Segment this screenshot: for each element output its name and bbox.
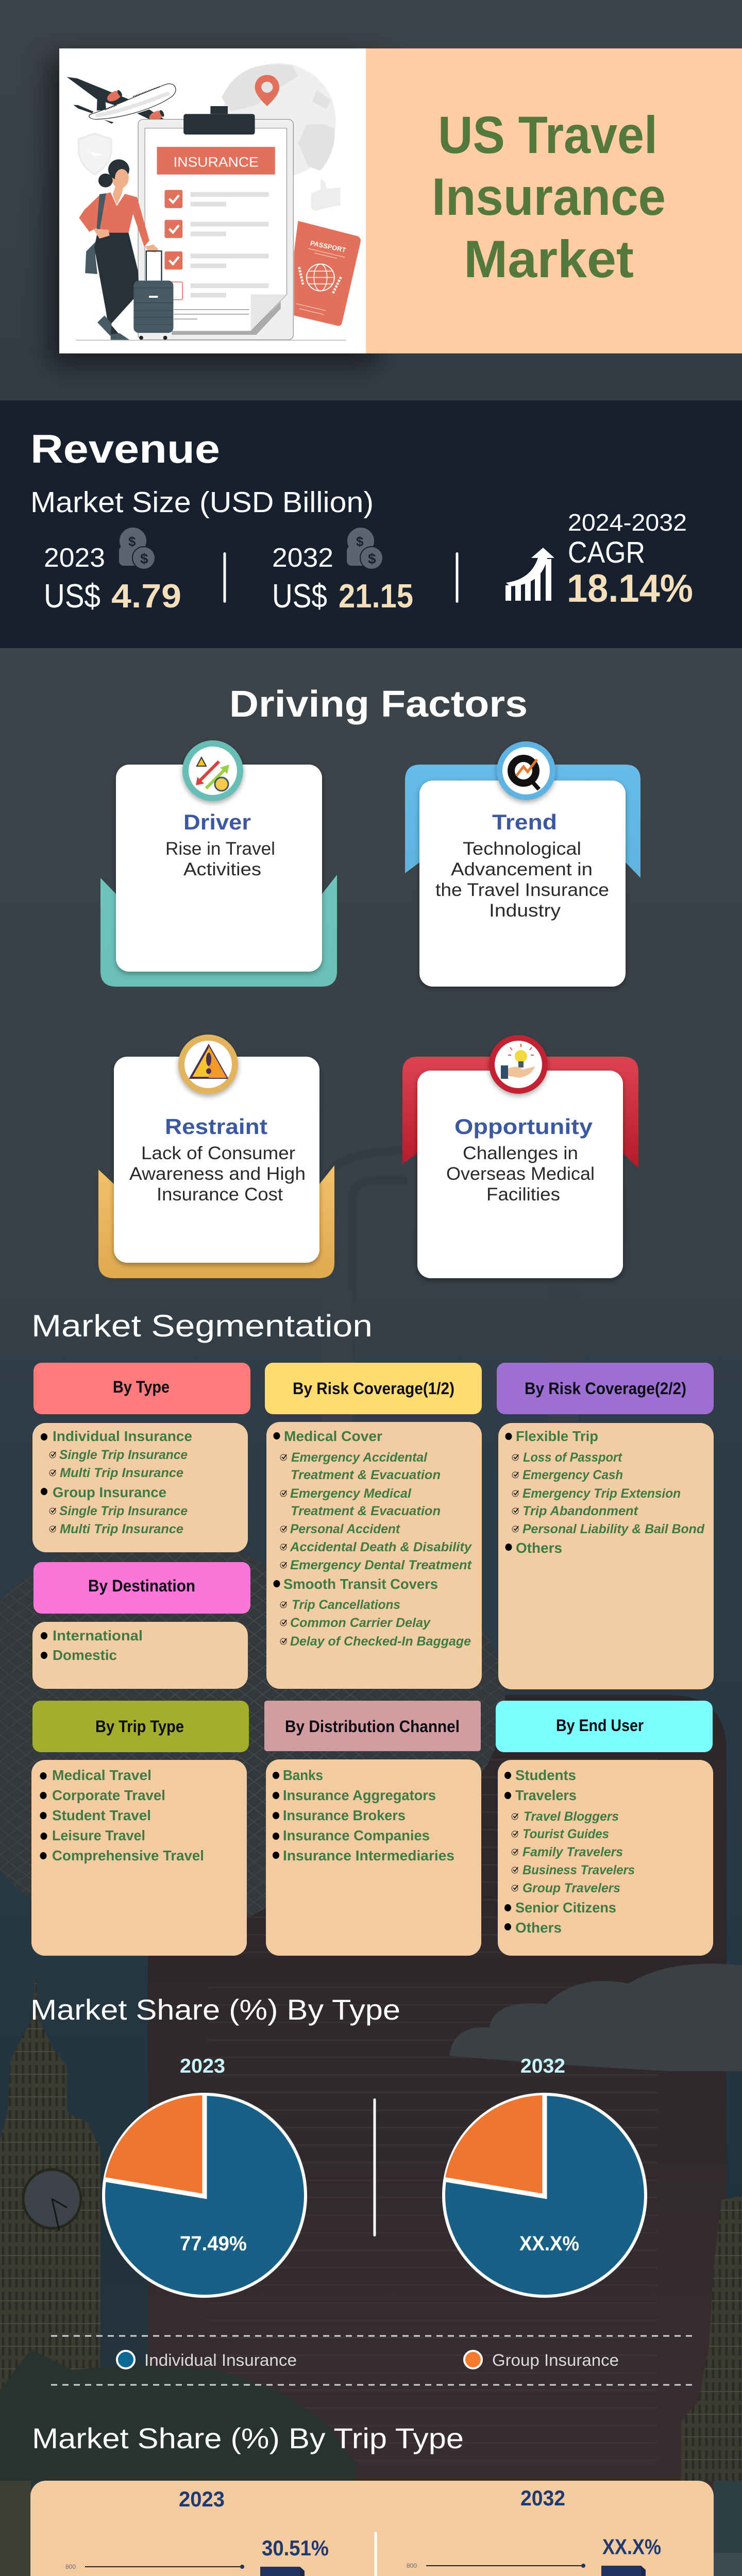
list: by end user items: Tourist Guides <box>522 1827 609 1841</box>
chart: 2023 bars: 2023 <box>179 2487 225 2511</box>
panel: by destination <box>32 1562 250 1689</box>
chart: 2032 bars <box>407 2486 661 2576</box>
stat: CAGR <box>567 509 693 611</box>
list: risk coverage 2 items <box>498 1423 714 1689</box>
year label 2032: 2032 <box>520 2055 565 2077</box>
text: restraint description <box>129 1143 306 1205</box>
text: restraint description: Awareness and High <box>129 1164 306 1184</box>
list: by end user items: Travel Bloggers <box>524 1809 619 1824</box>
icon: coins 2032: $ <box>368 551 376 567</box>
list: risk coverage 1 items: Delay of Checked-In Baggage <box>290 1634 471 1649</box>
list: by destination items: International <box>53 1628 143 1643</box>
heading: trend: Trend <box>492 810 557 834</box>
panel: by end user <box>496 1701 713 1956</box>
list: by distribution channel items: Insurance Brokers <box>283 1807 406 1823</box>
heading: restraint: Restraint <box>165 1114 267 1139</box>
icon: passport: PASSPORT <box>310 239 347 254</box>
divider <box>373 2098 376 2236</box>
list: risk coverage 1 items: Medical Cover <box>284 1428 382 1444</box>
chart: 2023 bars: 800 <box>65 2563 76 2570</box>
list: by type items: Group Insurance <box>53 1484 166 1500</box>
chart: 2032 bars: 2032 <box>520 2486 565 2510</box>
list: by distribution channel items <box>266 1759 481 1956</box>
stat: 2032 market size: US$ <box>272 577 327 615</box>
divider <box>456 552 459 603</box>
pie chart 2023 <box>104 2094 306 2296</box>
list: by type items: Multi Trip Insurance <box>60 1466 183 1480</box>
list: risk coverage 1 items: Emergency Dental Treatment <box>290 1558 473 1572</box>
list: risk coverage 1 items: Treatment & Evacuation <box>291 1504 441 1518</box>
year label 2023: 2023 <box>180 2055 225 2077</box>
title: Market <box>464 230 634 289</box>
header: by type <box>33 1363 250 1414</box>
list: by trip type items: Medical Travel <box>52 1767 151 1783</box>
stat: 2023 market size: 4.79 <box>111 577 181 615</box>
icon: shield <box>79 133 111 175</box>
list: risk coverage 1 items: Accidental Death & Disability <box>290 1540 472 1554</box>
text: restraint description: Lack of Consumer <box>141 1143 295 1163</box>
header: by destination <box>33 1562 250 1614</box>
heading: market share by type: Market Share (%) By Type <box>30 1993 400 2026</box>
list: risk coverage 1 items: Emergency Accidental <box>291 1450 428 1465</box>
icon: passport <box>294 221 361 326</box>
icon: location pin <box>255 75 279 106</box>
text: driver description: Activities <box>183 859 261 879</box>
heading: opportunity: Opportunity <box>454 1114 593 1139</box>
icon: coins 2023 <box>119 528 155 569</box>
list: by type items: Individual Insurance <box>53 1428 192 1444</box>
panel: revenue band <box>0 400 742 648</box>
icon: trend magnifier <box>497 741 555 800</box>
list: risk coverage 2 items: Personal Liability & Bail Bond <box>522 1522 705 1536</box>
list: risk coverage 1 items <box>266 1422 482 1689</box>
panel: trend card <box>405 741 640 987</box>
list: by end user items: Business Travelers <box>522 1863 635 1877</box>
list: by distribution channel items: Insurance Intermediaries <box>283 1848 454 1863</box>
title <box>432 106 666 289</box>
list: by end user items: Others <box>515 1920 562 1936</box>
list: by end user items: Students <box>515 1767 576 1783</box>
panel: share by trip type <box>30 2481 714 2576</box>
heading: market share by trip type: Market Share (%) By Trip Type <box>32 2422 464 2454</box>
text: trend description: Technological <box>463 839 581 859</box>
panel: by risk coverage 2 of 2 <box>497 1363 714 1689</box>
list: by trip type items: Student Travel <box>52 1807 151 1823</box>
list: by type items <box>32 1423 248 1552</box>
text: trend description: the Travel Insurance <box>435 880 609 900</box>
list: by end user items: Family Travelers <box>522 1845 623 1859</box>
text: opportunity description: Facilities <box>486 1184 560 1205</box>
list: by trip type items: Corporate Travel <box>52 1787 165 1803</box>
pie chart 2032: XX.X% <box>519 2232 579 2255</box>
chart: 2023 bars <box>65 2487 329 2576</box>
list: by end user items <box>498 1760 713 1956</box>
header: by destination: By Destination <box>88 1577 195 1595</box>
stat: 2023 market size <box>44 543 181 615</box>
panel: by trip type <box>31 1701 249 1956</box>
legend: share by type: Individual Insurance <box>144 2351 297 2369</box>
list: risk coverage 1 items: Treatment & Evacuation <box>291 1468 441 1482</box>
stat: CAGR: CAGR <box>568 536 645 569</box>
illustration: traveller with suitcase <box>79 159 173 340</box>
icon: thumbs up <box>311 178 341 211</box>
panel: opportunity card <box>402 1035 638 1278</box>
clipboard <box>138 106 293 340</box>
header: by distribution channel: By Distribution Channel <box>285 1717 460 1736</box>
panel: by risk coverage 1 of 2 <box>265 1363 482 1689</box>
text: trend description <box>435 839 609 921</box>
text: driver description <box>165 839 275 879</box>
list: risk coverage 1 items: Personal Accident <box>290 1522 401 1536</box>
chart: 2023 bars: 30.51% <box>262 2536 329 2560</box>
heading: driver: Driver <box>183 810 251 834</box>
chart: 2032 bars: 800 <box>407 2562 417 2569</box>
header: by risk coverage 1: By Risk Coverage(1/2) <box>293 1379 454 1398</box>
list: by type items: Single Trip Insurance <box>59 1448 188 1462</box>
icon: coins 2023: $ <box>128 534 136 549</box>
checklist <box>164 190 268 319</box>
panel: by distribution channel <box>264 1701 481 1956</box>
list: risk coverage 2 items: Flexible Trip <box>516 1428 598 1444</box>
stat: 2032 market size: 21.15 <box>339 577 413 615</box>
insurance banner <box>157 147 275 175</box>
subheading: market size: Market Size (USD Billion) <box>30 486 374 519</box>
list: risk coverage 1 items: Common Carrier Delay <box>290 1616 431 1630</box>
stat: 2032 market size: 2032 <box>272 543 333 573</box>
pie chart 2032 <box>444 2094 646 2296</box>
stat: 2023 market size: 2023 <box>44 543 105 573</box>
icon: coins 2032 <box>347 528 383 569</box>
list: risk coverage 2 items: Others <box>516 1540 562 1556</box>
legend: share by type <box>51 2336 695 2385</box>
text: trend description: Industry <box>489 901 561 921</box>
list: risk coverage 2 items: Emergency Trip Extension <box>522 1486 681 1501</box>
divider <box>224 552 226 603</box>
panel: title block <box>366 48 742 353</box>
stat: 2032 market size <box>272 543 413 615</box>
header: by trip type: By Trip Type <box>95 1717 184 1736</box>
icon: warning triangle <box>178 1035 238 1094</box>
panel: by type <box>32 1363 250 1552</box>
text: restraint description: Insurance Cost <box>157 1184 283 1205</box>
pie chart 2023: 77.49% <box>180 2232 247 2255</box>
insurance banner: INSURANCE <box>173 154 259 170</box>
list: by end user items: Group Travelers <box>522 1881 620 1895</box>
header: by risk coverage 1 <box>265 1363 482 1414</box>
text: opportunity description <box>446 1143 595 1205</box>
stat: 2023 market size: US$ <box>44 577 100 615</box>
list: risk coverage 2 items: Trip Abandonment <box>522 1504 639 1518</box>
header: by distribution channel <box>264 1701 481 1751</box>
header: by risk coverage 2 <box>497 1363 714 1414</box>
text: opportunity description: Overseas Medical <box>446 1164 595 1184</box>
header: by risk coverage 2: By Risk Coverage(2/2) <box>525 1379 686 1398</box>
text: opportunity description: Challenges in <box>463 1143 578 1163</box>
chart: share by type pies <box>104 2055 646 2296</box>
list: by distribution channel items: Insurance Aggregators <box>283 1787 436 1803</box>
header: by type: By Type <box>113 1378 170 1396</box>
header: by trip type <box>32 1701 249 1752</box>
text: trend description: Advancement in <box>451 859 593 879</box>
panel: hero illustration <box>59 48 366 353</box>
heading: driving factors: Driving Factors <box>229 684 528 725</box>
list: by type items: Single Trip Insurance <box>59 1504 188 1518</box>
heading: market segmentation: Market Segmentation <box>31 1309 373 1343</box>
title: Insurance <box>432 167 666 226</box>
list: risk coverage 1 items: Trip Cancellations <box>292 1598 400 1612</box>
list: by trip type items <box>31 1760 247 1956</box>
legend: share by type: Group Insurance <box>492 2351 619 2369</box>
stat: CAGR: 2024-2032 <box>568 509 687 536</box>
title: US Travel <box>438 106 657 164</box>
stat: CAGR: 18.14% <box>567 567 693 611</box>
heading: revenue: Revenue <box>30 426 220 471</box>
icon: coins 2032: $ <box>356 534 364 549</box>
list: by trip type items: Comprehensive Travel <box>52 1848 204 1863</box>
icon: airplane <box>67 77 178 128</box>
list: risk coverage 1 items: Smooth Transit Covers <box>283 1576 438 1592</box>
icon: light bulb and hand <box>489 1035 548 1094</box>
list: by type items: Multi Trip Insurance <box>60 1522 183 1536</box>
list: by distribution channel items: Insurance Companies <box>283 1827 430 1843</box>
list: by end user items: Senior Citizens <box>515 1900 616 1916</box>
header: by end user <box>496 1701 713 1752</box>
list: risk coverage 2 items: Loss of Passport <box>523 1450 623 1465</box>
list: risk coverage 2 items: Emergency Cash <box>522 1468 623 1482</box>
hero banner <box>49 48 742 366</box>
list: by trip type items: Leisure Travel <box>52 1827 145 1843</box>
icon: growth arrow <box>505 548 554 601</box>
chart: 2032 bars: XX.X% <box>602 2535 661 2558</box>
icon: coins 2023: $ <box>140 551 148 567</box>
list: by distribution channel items: Banks <box>283 1767 323 1783</box>
list: by destination items <box>32 1622 248 1689</box>
text: driver description: Rise in Travel <box>165 839 275 859</box>
icon: driver gears and arrows <box>182 740 243 801</box>
header: by end user: By End User <box>556 1716 644 1735</box>
list: by end user items: Travelers <box>515 1787 577 1803</box>
panel: restraint card <box>98 1035 334 1278</box>
divider <box>374 2532 377 2576</box>
panel: driver card <box>100 740 337 987</box>
list: risk coverage 1 items: Emergency Medical <box>290 1486 412 1501</box>
list: by destination items: Domestic <box>53 1647 117 1663</box>
